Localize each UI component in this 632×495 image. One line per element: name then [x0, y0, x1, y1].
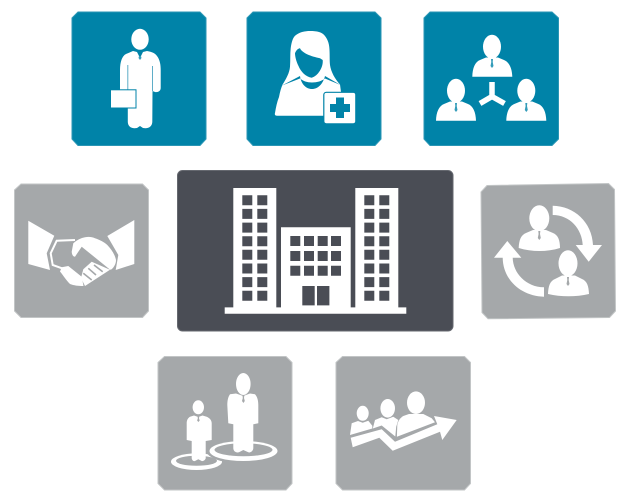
panel: team hierarchy — [424, 12, 558, 146]
icon: people with circular arrows — [494, 205, 602, 297]
icon: handshake — [28, 220, 134, 286]
panel: female doctor — [247, 12, 381, 146]
icon: three connected people — [436, 35, 546, 121]
panel: businessman with briefcase — [72, 12, 206, 146]
panel: team growth arrow — [336, 356, 470, 490]
icon: businessman — [110, 29, 161, 128]
panel: career growth people — [158, 356, 292, 490]
icon: female doctor with medical cross — [275, 31, 356, 124]
panel: handshake — [14, 184, 148, 318]
icon: people above rising arrow — [350, 391, 457, 451]
panel: central hospital building — [178, 170, 453, 331]
icon: small and large person on rings — [171, 373, 280, 470]
icon: hospital building — [225, 188, 406, 314]
panel: staff rotation — [481, 184, 616, 319]
